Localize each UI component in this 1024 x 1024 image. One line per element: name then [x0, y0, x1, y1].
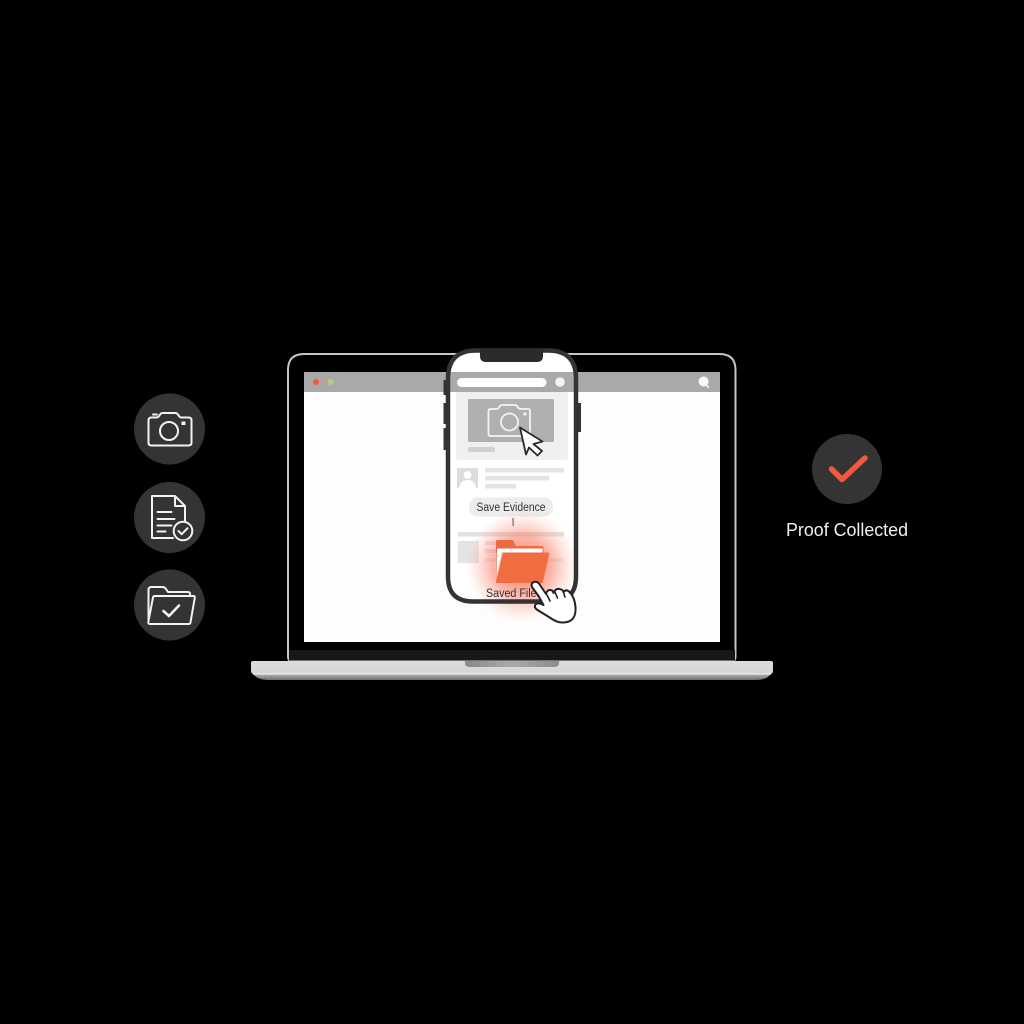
- proof collected label: Proof Collected: [786, 520, 908, 540]
- icon: camera: [134, 394, 205, 464]
- connector: [512, 518, 514, 526]
- browser bar: [304, 372, 720, 392]
- laptop lid: [288, 354, 736, 661]
- phone top bar: [450, 372, 574, 392]
- icon: hand pointer: [532, 582, 576, 623]
- phone frame: [448, 350, 576, 602]
- icon: orange folder: [496, 540, 549, 583]
- phone notch: [480, 349, 543, 362]
- icon: orange check: [812, 434, 882, 504]
- phone screen and frame: [448, 350, 576, 603]
- icon: camera on card: [488, 405, 530, 436]
- phone side buttons: [444, 380, 581, 450]
- saved item row: [458, 532, 564, 563]
- icon: folder with check: [134, 570, 205, 640]
- icon: mouse cursor: [520, 428, 542, 456]
- phone: [444, 349, 581, 623]
- proof collected status: [786, 434, 908, 540]
- icon: document with check: [134, 482, 205, 553]
- lower bezel strip: [289, 650, 735, 660]
- orange glow: [466, 510, 578, 622]
- laptop: [251, 354, 773, 680]
- save evidence button: [469, 498, 553, 516]
- evidence card: [456, 392, 568, 460]
- saved files label: Saved Files: [486, 588, 542, 600]
- laptop base: [251, 661, 773, 680]
- save evidence button: Save Evidence: [476, 502, 546, 514]
- profile row: [457, 468, 564, 488]
- left icon column: [134, 394, 205, 640]
- laptop screen: [304, 372, 720, 642]
